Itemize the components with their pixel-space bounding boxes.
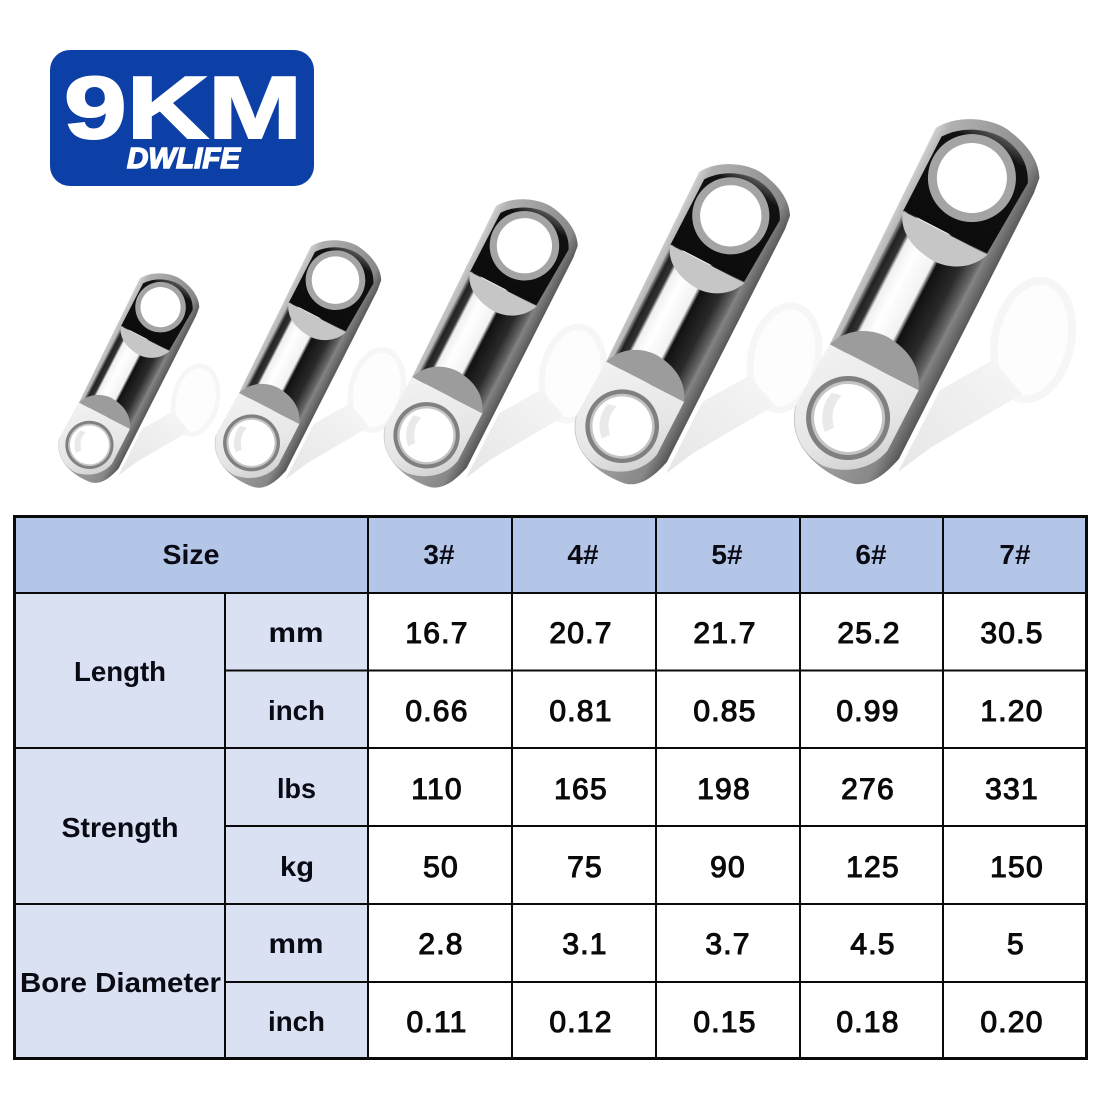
header row: 5# [711, 539, 743, 570]
swivel 4# [200, 227, 411, 498]
row: bore mm: 3.1 [562, 928, 608, 961]
row: bore inch: 0.18 [836, 1006, 900, 1039]
row: bore mm: 5 [1007, 928, 1025, 961]
row: strength lbs: 198 [697, 773, 751, 806]
unit labels: kg [280, 851, 314, 882]
row group labels: Strength [62, 812, 178, 843]
row: length mm: 20.7 [549, 617, 613, 650]
row: length inch: 1.20 [980, 695, 1044, 728]
swivel 6# [556, 147, 828, 497]
row group labels [20, 656, 221, 998]
logo: 9KM DWLIFE: 9KM [64, 58, 302, 157]
header row: 7# [999, 539, 1031, 570]
row group labels: Bore Diameter [20, 967, 221, 998]
row: length inch: 0.66 [405, 695, 469, 728]
swivel 7# [773, 100, 1083, 499]
row: length inch [405, 695, 1044, 728]
header row: Size [162, 539, 220, 570]
row: length mm: 30.5 [980, 617, 1044, 650]
unit labels: inch [268, 1006, 325, 1037]
row: strength lbs: 331 [985, 773, 1039, 806]
row: bore mm: 2.8 [418, 928, 464, 961]
unit labels: inch [268, 695, 325, 726]
row: bore inch: 0.11 [407, 1006, 467, 1039]
row: length mm: 16.7 [405, 617, 469, 650]
unit labels [268, 617, 325, 1037]
row: bore inch: 0.20 [980, 1006, 1044, 1039]
header row [162, 539, 1031, 570]
row: length inch: 0.99 [836, 695, 900, 728]
swivel 3# [46, 262, 224, 491]
row: strength lbs: 276 [841, 773, 895, 806]
row: strength lbs: 110 [411, 773, 463, 806]
header row: 4# [567, 539, 599, 570]
row: length mm [405, 617, 1044, 650]
logo: 9KM DWLIFE [50, 50, 314, 186]
row: bore mm [418, 928, 1025, 961]
row: strength kg: 90 [710, 851, 746, 884]
row: bore inch: 0.15 [693, 1006, 757, 1039]
row: bore inch [407, 1006, 1044, 1039]
unit labels: lbs [277, 773, 316, 804]
row: length inch: 0.85 [693, 695, 757, 728]
row: bore mm: 4.5 [850, 928, 896, 961]
row: length mm: 21.7 [693, 617, 757, 650]
row: strength kg: 50 [423, 851, 459, 884]
swivel 5# [367, 184, 612, 499]
unit labels: mm [268, 617, 324, 648]
header row: 6# [855, 539, 887, 570]
row: strength lbs [411, 773, 1039, 806]
row: bore mm: 3.7 [705, 928, 751, 961]
header row: 3# [423, 539, 455, 570]
row: length inch: 0.81 [549, 695, 613, 728]
row group labels: Length [74, 656, 166, 687]
logo: 9KM DWLIFE: DWLIFE [127, 143, 242, 175]
size specification table [14, 516, 1087, 1059]
unit labels: mm [268, 928, 324, 959]
row: length mm: 25.2 [837, 617, 901, 650]
row: strength lbs: 165 [554, 773, 608, 806]
row: strength kg: 150 [990, 851, 1044, 884]
row: strength kg [423, 851, 1044, 884]
row: strength kg: 75 [567, 851, 603, 884]
row: bore inch: 0.12 [549, 1006, 613, 1039]
row: strength kg: 125 [846, 851, 900, 884]
